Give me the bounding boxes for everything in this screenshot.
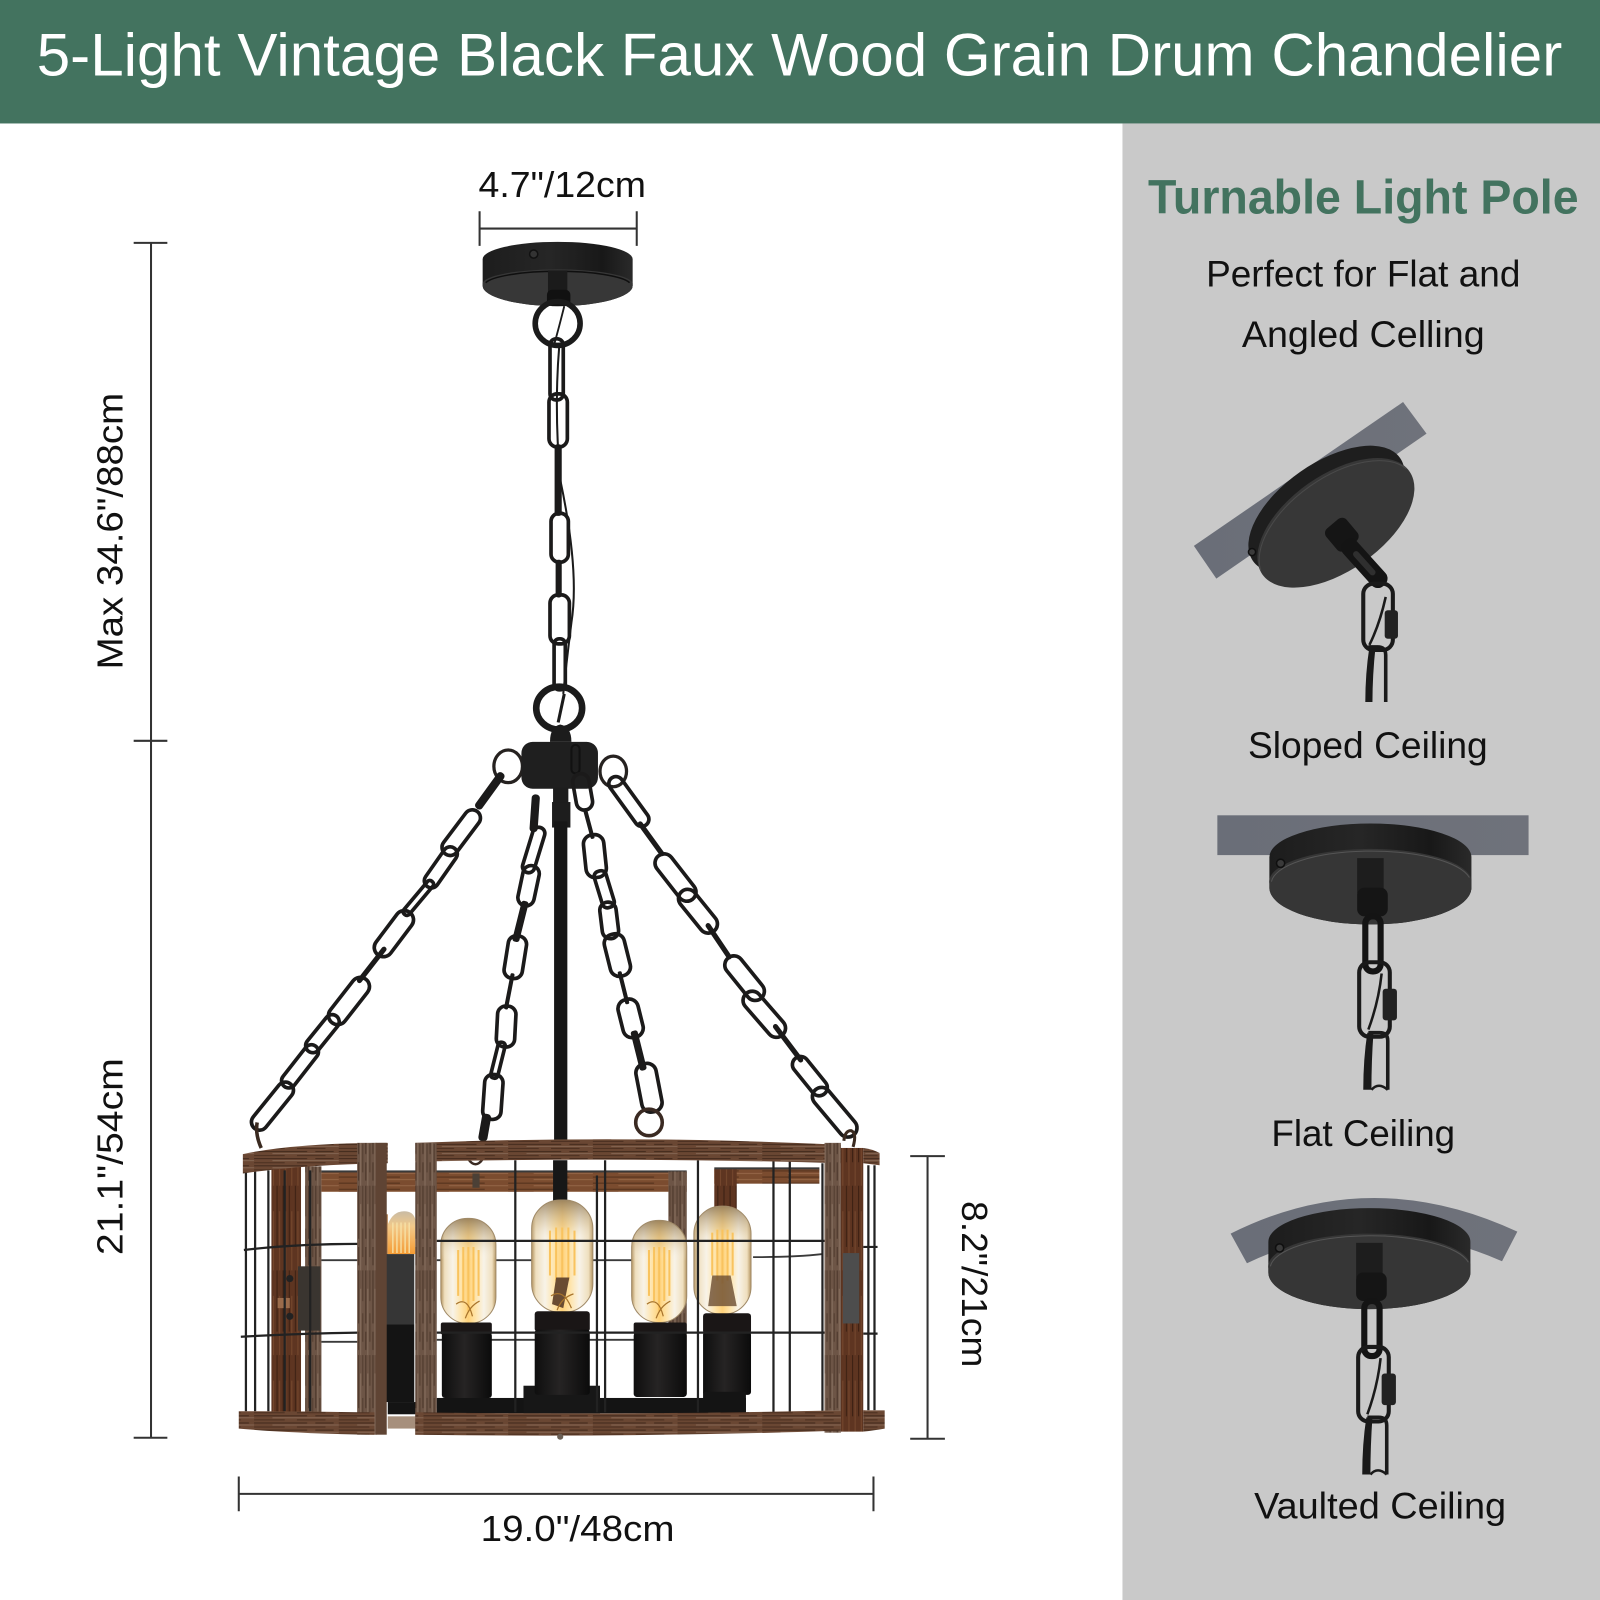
dimension: canopy width: [479, 165, 646, 246]
chain: outer right: [606, 774, 861, 1147]
chain: outer left: [248, 771, 505, 1148]
sloped ceiling illustration: [1194, 402, 1437, 702]
dimension: drum height: 8.2"/21cm: [954, 1201, 994, 1367]
title: 5-Light Vintage Black Faux Wood Grain Drum Chandelier: [37, 22, 1562, 89]
bulb: front left: [441, 1218, 496, 1398]
panel description: Perfect for Flat and: [1206, 254, 1520, 295]
center pole: [552, 788, 570, 1141]
upper chain: [535, 302, 582, 730]
drum: center section: [415, 1139, 841, 1440]
bulb: rear right: [694, 1206, 751, 1412]
bulb: front right: [632, 1220, 687, 1397]
drum: left section: [239, 1143, 388, 1435]
dimension: overall height: 21.1"/54cm: [90, 1058, 130, 1255]
sloped ceiling label: Sloped Ceiling: [1248, 725, 1488, 766]
panel description: Angled Celling: [1242, 314, 1485, 355]
bulb: rear left: [379, 1211, 416, 1429]
flat ceiling label: Flat Ceiling: [1271, 1113, 1455, 1154]
dimension: drum width: [239, 1477, 873, 1549]
dimension: overall height: [90, 243, 167, 1438]
chain: inner left: [478, 795, 546, 1141]
panel description: [1206, 254, 1520, 355]
title banner: [0, 0, 1600, 123]
dimension: overall height: Max 34.6"/88cm: [90, 393, 130, 669]
vaulted ceiling label: Vaulted Ceiling: [1254, 1485, 1506, 1526]
chain: inner right: [571, 772, 664, 1136]
drum: rear frames: [271, 1159, 822, 1413]
dimension: drum height: [910, 1156, 994, 1439]
panel heading: Turnable Light Pole: [1148, 171, 1579, 224]
bulb: center: [532, 1200, 593, 1395]
vaulted ceiling illustration: [1231, 1198, 1517, 1474]
panel: turnable light pole background: [1122, 123, 1600, 1600]
dimension: drum width: 19.0"/48cm: [481, 1509, 674, 1549]
drum: wire cage: [241, 1160, 878, 1412]
drum: right section: [841, 1148, 885, 1432]
dimension: canopy width: 4.7"/12cm: [479, 165, 646, 205]
ceiling canopy: [483, 242, 633, 306]
hub and rings: [494, 724, 627, 789]
chandelier: [239, 242, 885, 1440]
flat ceiling illustration: [1217, 815, 1529, 1090]
